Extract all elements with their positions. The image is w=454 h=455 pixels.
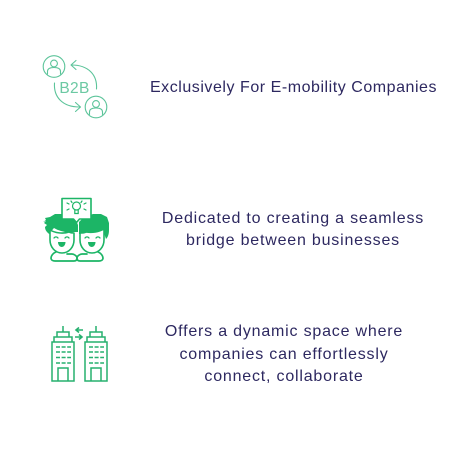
icon: B2B people with arrows — [43, 56, 107, 118]
exchange arrows — [75, 328, 83, 340]
speech bubble — [62, 198, 91, 222]
text: exclusively for e-mobility companies: Exclusively For E-mobility Companies — [150, 78, 437, 96]
icon: two smiling people with lightbulb idea — [43, 198, 109, 261]
hair right — [79, 214, 109, 239]
left tower — [52, 342, 74, 381]
text: offers a dynamic space: Offers a dynamic space where — [165, 323, 403, 340]
icon: two office towers — [52, 326, 107, 381]
windows — [56, 347, 104, 363]
text: offers a dynamic space: companies can effortlessly — [179, 346, 389, 362]
hair left — [43, 214, 78, 235]
lightbulb — [67, 201, 86, 214]
facial features — [54, 237, 100, 238]
bodies and arms — [51, 252, 103, 261]
icon: B2B people with arrows: B2B — [59, 80, 90, 97]
text: offers a dynamic space: connect, collaborate — [204, 368, 364, 385]
text: offers a dynamic space — [165, 323, 403, 385]
right tower — [85, 342, 107, 381]
text: dedicated to creating a seamless bridge: bridge between businesses — [186, 232, 400, 248]
faces — [50, 229, 104, 253]
text: dedicated to creating a seamless bridge — [162, 210, 424, 248]
text: dedicated to creating a seamless bridge: Dedicated to creating a seamless — [162, 210, 424, 226]
